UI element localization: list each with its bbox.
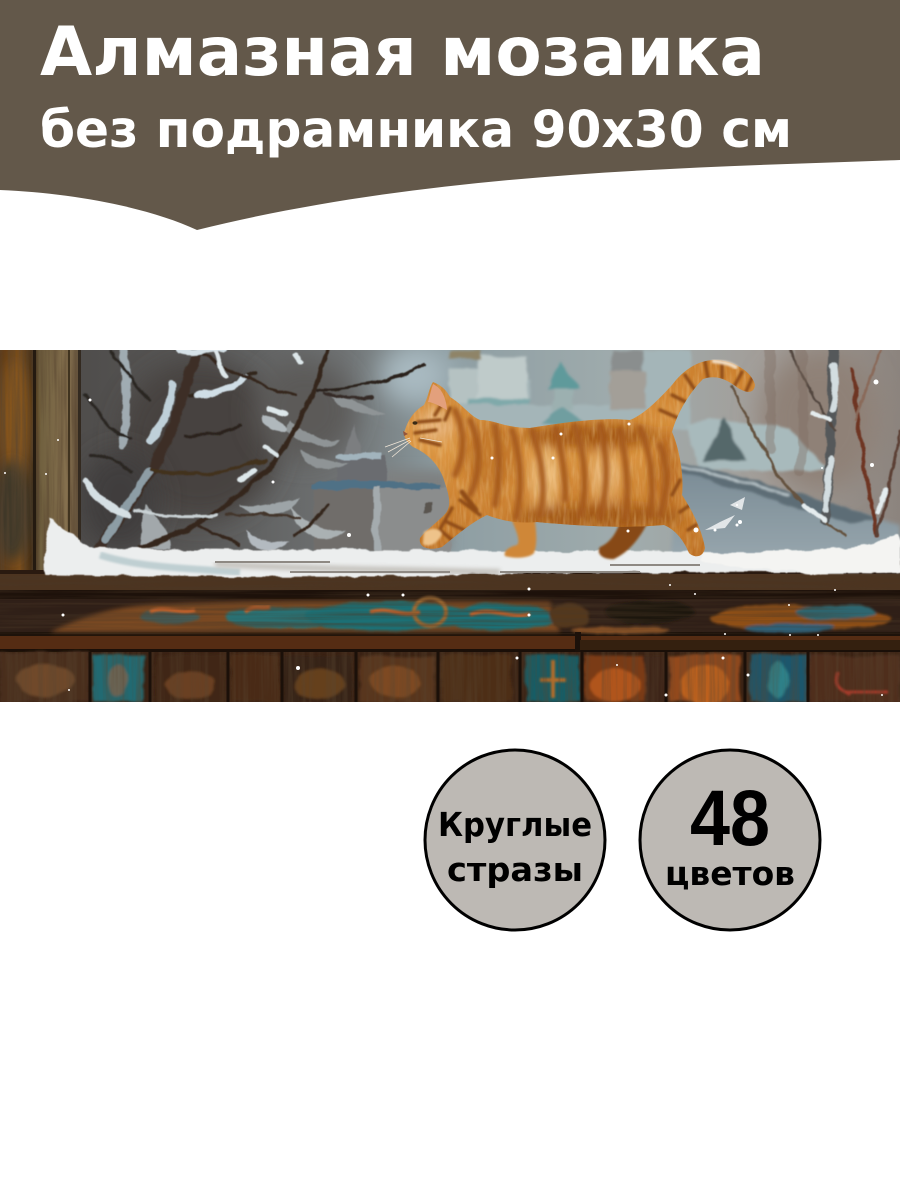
cat ear (428, 384, 447, 410)
cat body (404, 360, 755, 556)
snow on the ledge (44, 518, 900, 577)
number of colours: 48 (690, 773, 770, 862)
paws (423, 529, 442, 546)
cat whiskers (385, 438, 442, 457)
subtitle: без подрамника 90х30 см (40, 101, 792, 160)
badge text line 2: стразы (447, 850, 583, 889)
teal ornament frieze (0, 590, 900, 650)
bare trees with snow on the left (85, 349, 425, 548)
far front leg (505, 512, 536, 558)
header banner (0, 0, 900, 230)
badge text line 1: Круглые (438, 805, 592, 844)
banner shape (0, 0, 900, 230)
grey building left of the cat (312, 425, 450, 552)
lower decorated panels (0, 652, 900, 705)
left window post (0, 350, 81, 578)
badge: 48 colours (640, 750, 820, 930)
falling snow (4, 380, 883, 696)
cat eye (412, 421, 418, 425)
far hind leg (597, 526, 648, 561)
colours label: цветов (665, 854, 795, 893)
wooden ledge (0, 570, 900, 702)
winter background (81, 350, 900, 568)
badge: round rhinestones (425, 750, 605, 930)
distant church and buildings (450, 350, 880, 524)
painting: orange cat walking on a snowy window ledge (0, 345, 900, 705)
snowy fir shapes (140, 395, 385, 550)
orange cat (385, 355, 760, 560)
tail tip light (712, 361, 737, 368)
bare trees on the right (730, 350, 900, 535)
cat nose (403, 431, 408, 436)
cat fur stripes (400, 355, 760, 560)
title: Алмазная мозаика (40, 13, 765, 92)
